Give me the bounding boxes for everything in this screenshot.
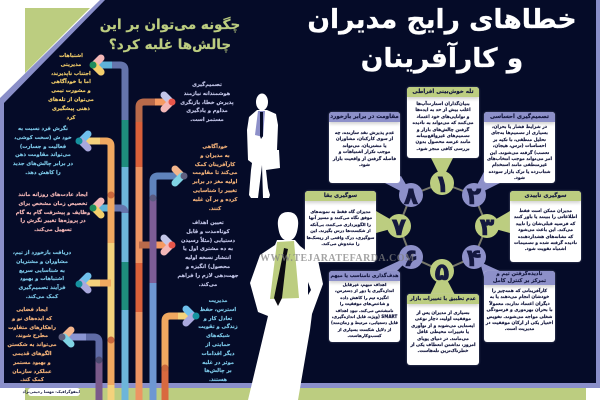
card 6: vague goals: قابل دستیابی، مرتبط و زمان‌مند) [331, 320, 398, 325]
pipe: orange trunk [139, 95, 176, 400]
tip: feedback: اشتباهات و بهبود [20, 276, 64, 282]
tip: mindset: در برابر چالش‌های جدید [13, 161, 73, 167]
card 4: ignoring team: با بحران بهره‌وری و فرسودگی [486, 308, 552, 313]
tip: new ideas: که ایده‌های نو و [12, 316, 52, 322]
card 2: emotional decisions: شتاب‌زده یا ترک بازار سودده [489, 170, 550, 175]
card 6: vague goals [329, 271, 400, 342]
tip: daily habits: ایجاد عادت‌های روزانه مانند [18, 192, 88, 198]
connector ring and numbers: ۷ [392, 213, 407, 241]
tip: mistakes unavoidable: اشتباهات [59, 53, 83, 59]
tip: feedback: به شناسایی سریع [19, 268, 65, 274]
card 6: vague goals: کسب‌وکارهاست. [348, 333, 382, 338]
card 4: ignoring team: خودشان انجام می‌دهند یا به [490, 295, 549, 300]
tip: stress management: حمایتی از [205, 342, 231, 348]
card 7: survivorship bias: سوگیری بقا [324, 193, 357, 199]
card 3: confirmation bias [510, 191, 581, 262]
tip: stress management: تعادل کار و [204, 316, 232, 322]
card 6: vague goals: اهداف مبهم، غیرقابل [343, 282, 386, 287]
tip: short term goals: دستیابی (مثلاً رسیدن [181, 238, 235, 244]
tip: new ideas: کمک کند. [20, 377, 44, 383]
card 2: emotional decisions: در شرایط فشار یا بحران، [492, 125, 547, 130]
card 3: confirmation bias: اطلاعاتی را ببینند یا باور کنند [514, 215, 577, 220]
tip: mindset: نگرش فرد نسبت به [18, 126, 68, 132]
card 6: vague goals: انگیزه تیم را کاهش داده [340, 295, 389, 300]
tip: mistakes unavoidable: ذهنی پیشگیری [52, 106, 90, 112]
card 4: ignoring team: کارآفرینانی که همه‌چیز را [492, 289, 547, 294]
tip: daily habits: تخصیص زمان مشخص برای [18, 201, 88, 207]
card 3: confirmation bias: مدیران ممکن است فقط [519, 209, 572, 214]
card 7: survivorship bias: مدیران گاه فقط به نمونه‌های [310, 209, 371, 214]
connector ring and numbers: ۳ [480, 213, 495, 241]
card 1: optimism trap [407, 87, 479, 158]
tip: stress management [198, 298, 238, 383]
card 3: confirmation bias: می‌کند. این باعث می‌شود [518, 228, 573, 233]
card 4: ignoring team: نادیده‌گرفتن تیم و [497, 271, 542, 277]
tip: self-awareness: کرده و بر آن غلبه [193, 197, 237, 203]
connector ring and numbers: ۱ [435, 170, 449, 198]
tip: mindset: می‌تواند مقاومت ذهن [15, 152, 71, 158]
card 1: optimism trap: تله خوش‌بینی افراطی [412, 89, 474, 95]
card 2: emotional decisions: بسیاری از تصمیم‌ها به‌جای [491, 131, 548, 136]
card 5: not adapting to market: عدم تطبیق با تغییرات بازار [410, 296, 476, 302]
card 2: emotional decisions: تحلیل منطقی، با تکیه بر [493, 138, 546, 143]
tip: stress management: مدیریت [209, 298, 227, 304]
card 2: emotional decisions [484, 112, 555, 183]
tip: self-awareness: می‌کند تا مقاومت [193, 170, 237, 176]
pipe: lower left trunk [58, 330, 102, 400]
card 3: confirmation bias: که نشانه‌های هشداردهنده [518, 235, 573, 240]
tip: mistakes unavoidable: اجتناب ناپذیرند، [51, 71, 91, 77]
tip: new ideas: الگوهای قدیمی [12, 351, 52, 357]
card 1: optimism trap: بنیان‌گذاران استارت‌آپ‌ها [416, 102, 470, 107]
tip: short term goals: انتشار نسخه اولیه [185, 255, 231, 261]
heading: how to overcome [100, 16, 240, 53]
card 3: confirmation bias: که فرضیه قبلی‌شان را تایید [516, 222, 575, 227]
card 6: vague goals: اندازه‌گیری یا دور از دسترس، [335, 288, 394, 293]
heading: how to overcome: چالش‌ها غلبه کرد؟ [109, 37, 231, 53]
tip: short term goals [177, 220, 239, 288]
card 7: survivorship bias: موفق نگاه می‌کنند و مسیر آنها [309, 215, 372, 220]
card 4: ignoring team: مدیریت است. [505, 327, 534, 332]
tip: mistakes unavoidable: مدیریتی [61, 62, 81, 68]
tip: smart decisions: پذیرش خطا، بازنگری [180, 100, 234, 106]
connector ring and numbers: ۴ [467, 244, 481, 272]
tip: feedback: مشاوران و مشتریان [16, 259, 68, 265]
pipe: yellow-orange trunk [76, 134, 114, 400]
card 8: resistance to feedback: فاصله گرفتن از واقعیت بازار [333, 157, 396, 162]
tip: mindset: فعالیت و جسارت) [20, 144, 66, 150]
connector ring and numbers: ۵ [435, 258, 449, 286]
card 2: emotional decisions: تعصب) گرفته می‌شوند. این [490, 151, 549, 156]
card 6: vague goals: SMART (ویژه، قابل اندازه‌گیری، [332, 314, 397, 319]
card 8: resistance to feedback: یا مشتریان، می‌تواند [342, 144, 387, 149]
tip: self-awareness: کارآفرینان کمک [195, 162, 235, 168]
card 5: not adapting to market: می‌مانند. در دنیای پویای [417, 337, 469, 342]
tip: new ideas: و بهبود مستمر [13, 360, 51, 366]
card 8: resistance to feedback: مقاومت در برابر بازخورد [330, 114, 399, 120]
card 2: emotional decisions: احساسات (ترس، هیجان، [493, 144, 546, 149]
card 5: not adapting to market: بسیاری از مدیران پس از [416, 311, 470, 316]
tip: mistakes unavoidable: و مشورت تیمی [51, 88, 91, 94]
connector ring and numbers: ۶ [404, 244, 418, 272]
card 8: resistance to feedback: موجب تکرار اشتباهات و [339, 150, 390, 155]
card 5: not adapting to market: موفقیت اولیه، دچار نوعی [415, 317, 471, 322]
heading: how to overcome: چگونه می‌توان بر این [100, 17, 240, 33]
tip: daily habits: وظایف و پیشرفت گام به گام [16, 210, 90, 216]
tip: new ideas: راهکارهای متفاوت [8, 325, 56, 331]
card 2: emotional decisions: تصمیم‌گیری احساسی [490, 114, 549, 120]
card 5: not adapting to market: امروز، نداشتن انعطاف یکی از [410, 343, 476, 348]
card 6: vague goals: و شاخص‌های موفقیت را [340, 301, 389, 306]
card 1: optimism trap: گرفتن چالش‌های بازار و [417, 128, 469, 133]
card 7: survivorship bias: از شکست‌ها درس بگیرند. این [310, 228, 371, 233]
card 3: confirmation bias: نادیده گرفته شده و تصمیمات [514, 241, 577, 246]
tip: stress management: دیگر اقدامات [202, 351, 234, 357]
tip: stress management: استرس، حفظ [200, 307, 236, 313]
tip: mistakes unavoidable: می‌توان از تله‌های [48, 97, 94, 103]
tip: self-awareness: کنند. [209, 206, 221, 212]
card 5: not adapting to market: یا تغییرات محیطی غافل [417, 330, 469, 335]
card 5: not adapting to market: خطرناک‌ترین تله‌هاست. [418, 349, 468, 354]
tip: self-awareness: تغییر را شناسایی [193, 188, 237, 194]
card 1: optimism trap: بررسی کافی منجر شود. [416, 147, 470, 152]
card 7: survivorship bias [305, 191, 376, 262]
tip: self-awareness: خودآگاهی [202, 144, 228, 150]
tip: short term goals: به ده مشتری اول یا [183, 246, 233, 252]
tip: new ideas: عملکرد سازمان [12, 369, 52, 375]
card 8: resistance to feedback [329, 112, 400, 183]
title [307, 4, 577, 74]
tip: stress management: زندگی و تقویت [198, 324, 238, 330]
card 2: emotional decisions: غیرمنطقی مانند استخدام [492, 163, 547, 168]
tip: self-awareness [192, 143, 238, 212]
tip: short term goals: کوتاه‌مدت و قابل [186, 229, 230, 235]
tip: short term goals: تعیین اهداف [192, 220, 224, 226]
tip: mistakes unavoidable: کرد [67, 115, 75, 121]
pipe: lower centre trunk [162, 309, 200, 400]
tip: self-awareness: اولیه مغز در برابر [193, 179, 237, 185]
card 1: optimism trap: مانند عرضه محصول بدون [416, 140, 470, 145]
tip: stress management: شبکه‌های [206, 333, 230, 339]
card 3: confirmation bias: اشتباه تقویت شود. [525, 247, 566, 252]
card 4: ignoring team: دیگران اعتماد ندارند، معمولاً [489, 302, 550, 307]
tip: new ideas: ایجاد فضایی [16, 307, 48, 313]
tip: short term goals: می‌کند. [199, 282, 217, 288]
tip: feedback: فرآیند تصمیم‌گیری [18, 285, 66, 291]
pipe: purple-blue trunk [150, 169, 188, 400]
tip: daily habits: در پروژه‌ها تغییر نگرش را [20, 218, 86, 224]
card 5: not adapting to market [407, 294, 479, 365]
card 1: optimism trap: می‌کنند که می‌تواند به نادیده [412, 121, 474, 126]
tip: smart decisions [180, 81, 234, 123]
card 7: survivorship bias: را الگوبرداری می‌کنند، بی‌آنکه [310, 222, 371, 227]
tip: short term goals: جهت‌دهی لازم را فراهم [177, 273, 239, 279]
card 6: vague goals: نامشخص می‌کند. نبود اهداف [336, 308, 393, 313]
card 4: ignoring team: شغلی مواجه می‌شوند. تفویض [487, 315, 552, 320]
pipe: top-left arrow trunk [90, 58, 125, 400]
tip: smart decisions: هوشمندانه نیازمند [184, 91, 230, 97]
tip: new ideas [7, 306, 57, 383]
tip: stress management: هستند. [209, 377, 227, 383]
card 4: ignoring team: اختیار یکی از ارکان موفقیت در [486, 321, 553, 326]
tip: feedback [13, 250, 71, 300]
card 8: resistance to feedback: عدم پذیرش نقد سازنده، چه [335, 131, 394, 136]
card 5: not adapting to market: ایستایی می‌شوند و از نوآوری [411, 324, 475, 329]
card 6: vague goals: از دلایل شکست بسیاری از [338, 327, 391, 332]
tip: mistakes unavoidable [48, 52, 94, 121]
tip: self-awareness: به مدیران و [200, 153, 230, 159]
tip: mindset: خود ش (سخت کوشی، [14, 135, 72, 141]
title: و کارآفرینان [361, 43, 523, 74]
card 1: optimism trap: اغلب بیش از حد به ایده‌ها [415, 108, 471, 113]
tip: mistakes unavoidable: اما با خودآگاهی [51, 79, 91, 85]
card 8: resistance to feedback: شود. [359, 163, 370, 168]
credit pill: اینفوگرافیک: مهسا رحیمی‌نژاد [23, 389, 80, 394]
card 2: emotional decisions: امر می‌تواند موجب انتخاب‌های [487, 157, 552, 162]
tip: daily habits [16, 192, 90, 233]
tip: new ideas: مطرح شوند، [16, 333, 48, 339]
tip: feedback: دریافت بازخورد از تیم، [13, 250, 71, 256]
card 1: optimism trap: و توانایی‌های خود اعتماد [417, 115, 469, 120]
card 1: optimism trap: تصمیم‌های غیرواقع‌بینانه [416, 134, 470, 139]
tip: stress management: موثر در غلبه [202, 360, 234, 366]
tip: smart decisions: تصمیم‌گیری [192, 82, 222, 88]
card 6: vague goals: هدف‌گذاری نامناسب یا مبهم [331, 273, 398, 279]
tip: mindset: را کاهش دهد. [25, 170, 61, 176]
card 8: resistance to feedback: از سوی کارکنان، مشاوران [336, 137, 393, 142]
tip: mindset [13, 125, 73, 176]
tip: short term goals: محصول) انگیزه و [186, 264, 230, 270]
credit pill [28, 388, 80, 396]
card 4: ignoring team [484, 271, 555, 342]
card 7: survivorship bias: سوگیری، درک واقعی از ریسک‌ها [307, 235, 374, 240]
title: خطاهای رایج مدیران [307, 4, 577, 35]
tip: daily habits: تسهیل می‌کند. [34, 227, 72, 233]
card 4: ignoring team: تمرکز بر کنترل کامل [493, 278, 546, 284]
tip: new ideas: می‌تواند به شکستن [7, 342, 57, 348]
watermark: WWW.TEJARATEFARDA.COM [260, 253, 415, 264]
card 3: confirmation bias: سوگیری تاییدی [524, 193, 567, 199]
tip: feedback: کمک می‌کند. [26, 294, 58, 300]
tip: stress management: بر چالش‌ها [204, 368, 232, 374]
card 7: survivorship bias: را مخدوش می‌کند. [321, 241, 360, 246]
connector ring and numbers: ۲ [467, 182, 482, 210]
connector ring and numbers: ۸ [404, 182, 419, 210]
tip: smart decisions: مستمر است. [190, 117, 224, 123]
tip: smart decisions: مداوم و یادگیری [186, 108, 228, 114]
card 2: emotional decisions: شود. [514, 176, 525, 181]
